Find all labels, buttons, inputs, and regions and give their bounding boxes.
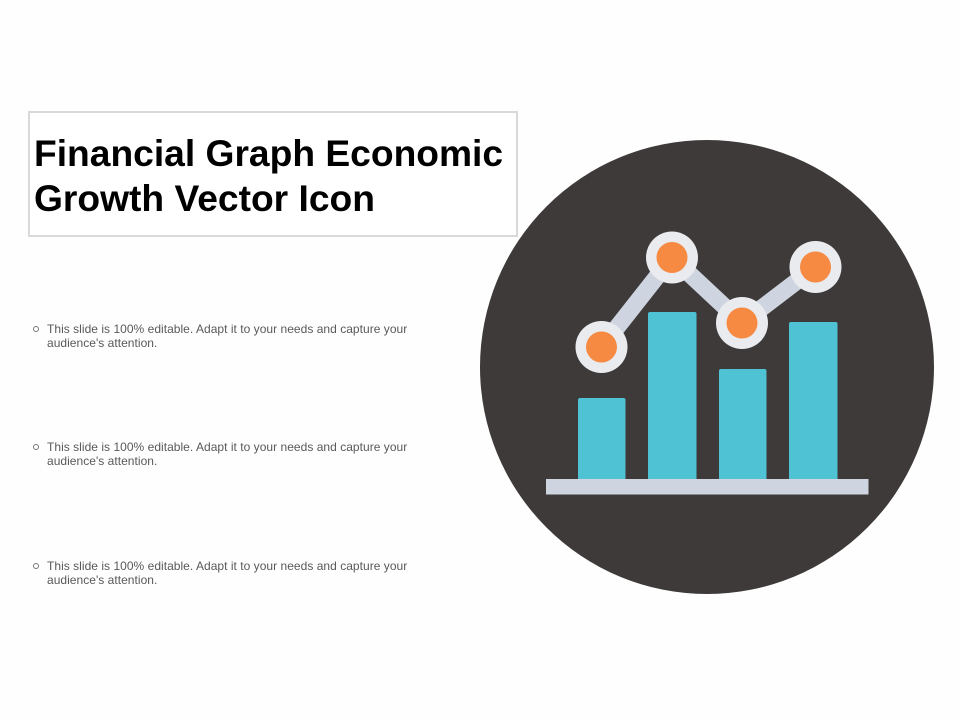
- trend line: [602, 258, 816, 347]
- bullet text 2: This slide is 100% editable. Adapt it to your needs and capture your: [47, 440, 407, 454]
- bar chart: [578, 312, 838, 482]
- bullet text 2: audience's attention.: [47, 454, 157, 468]
- bullet text 3: This slide is 100% editable. Adapt it to your needs and capture your: [47, 559, 407, 573]
- bullet text 1: [33, 322, 408, 350]
- dark circle background: [480, 140, 934, 594]
- title: Financial Graph Economic: [34, 132, 503, 174]
- baseline: [546, 479, 868, 494]
- bullet text 1: audience's attention.: [47, 336, 157, 350]
- bullet text 3: audience's attention.: [47, 573, 157, 587]
- title: Growth Vector Icon: [34, 177, 375, 219]
- bullet text 1: This slide is 100% editable. Adapt it to your needs and capture your: [47, 322, 407, 336]
- bullet text 2: [33, 440, 408, 468]
- bullet text 3: [33, 559, 408, 587]
- data points: [576, 232, 842, 373]
- title: [28, 111, 518, 237]
